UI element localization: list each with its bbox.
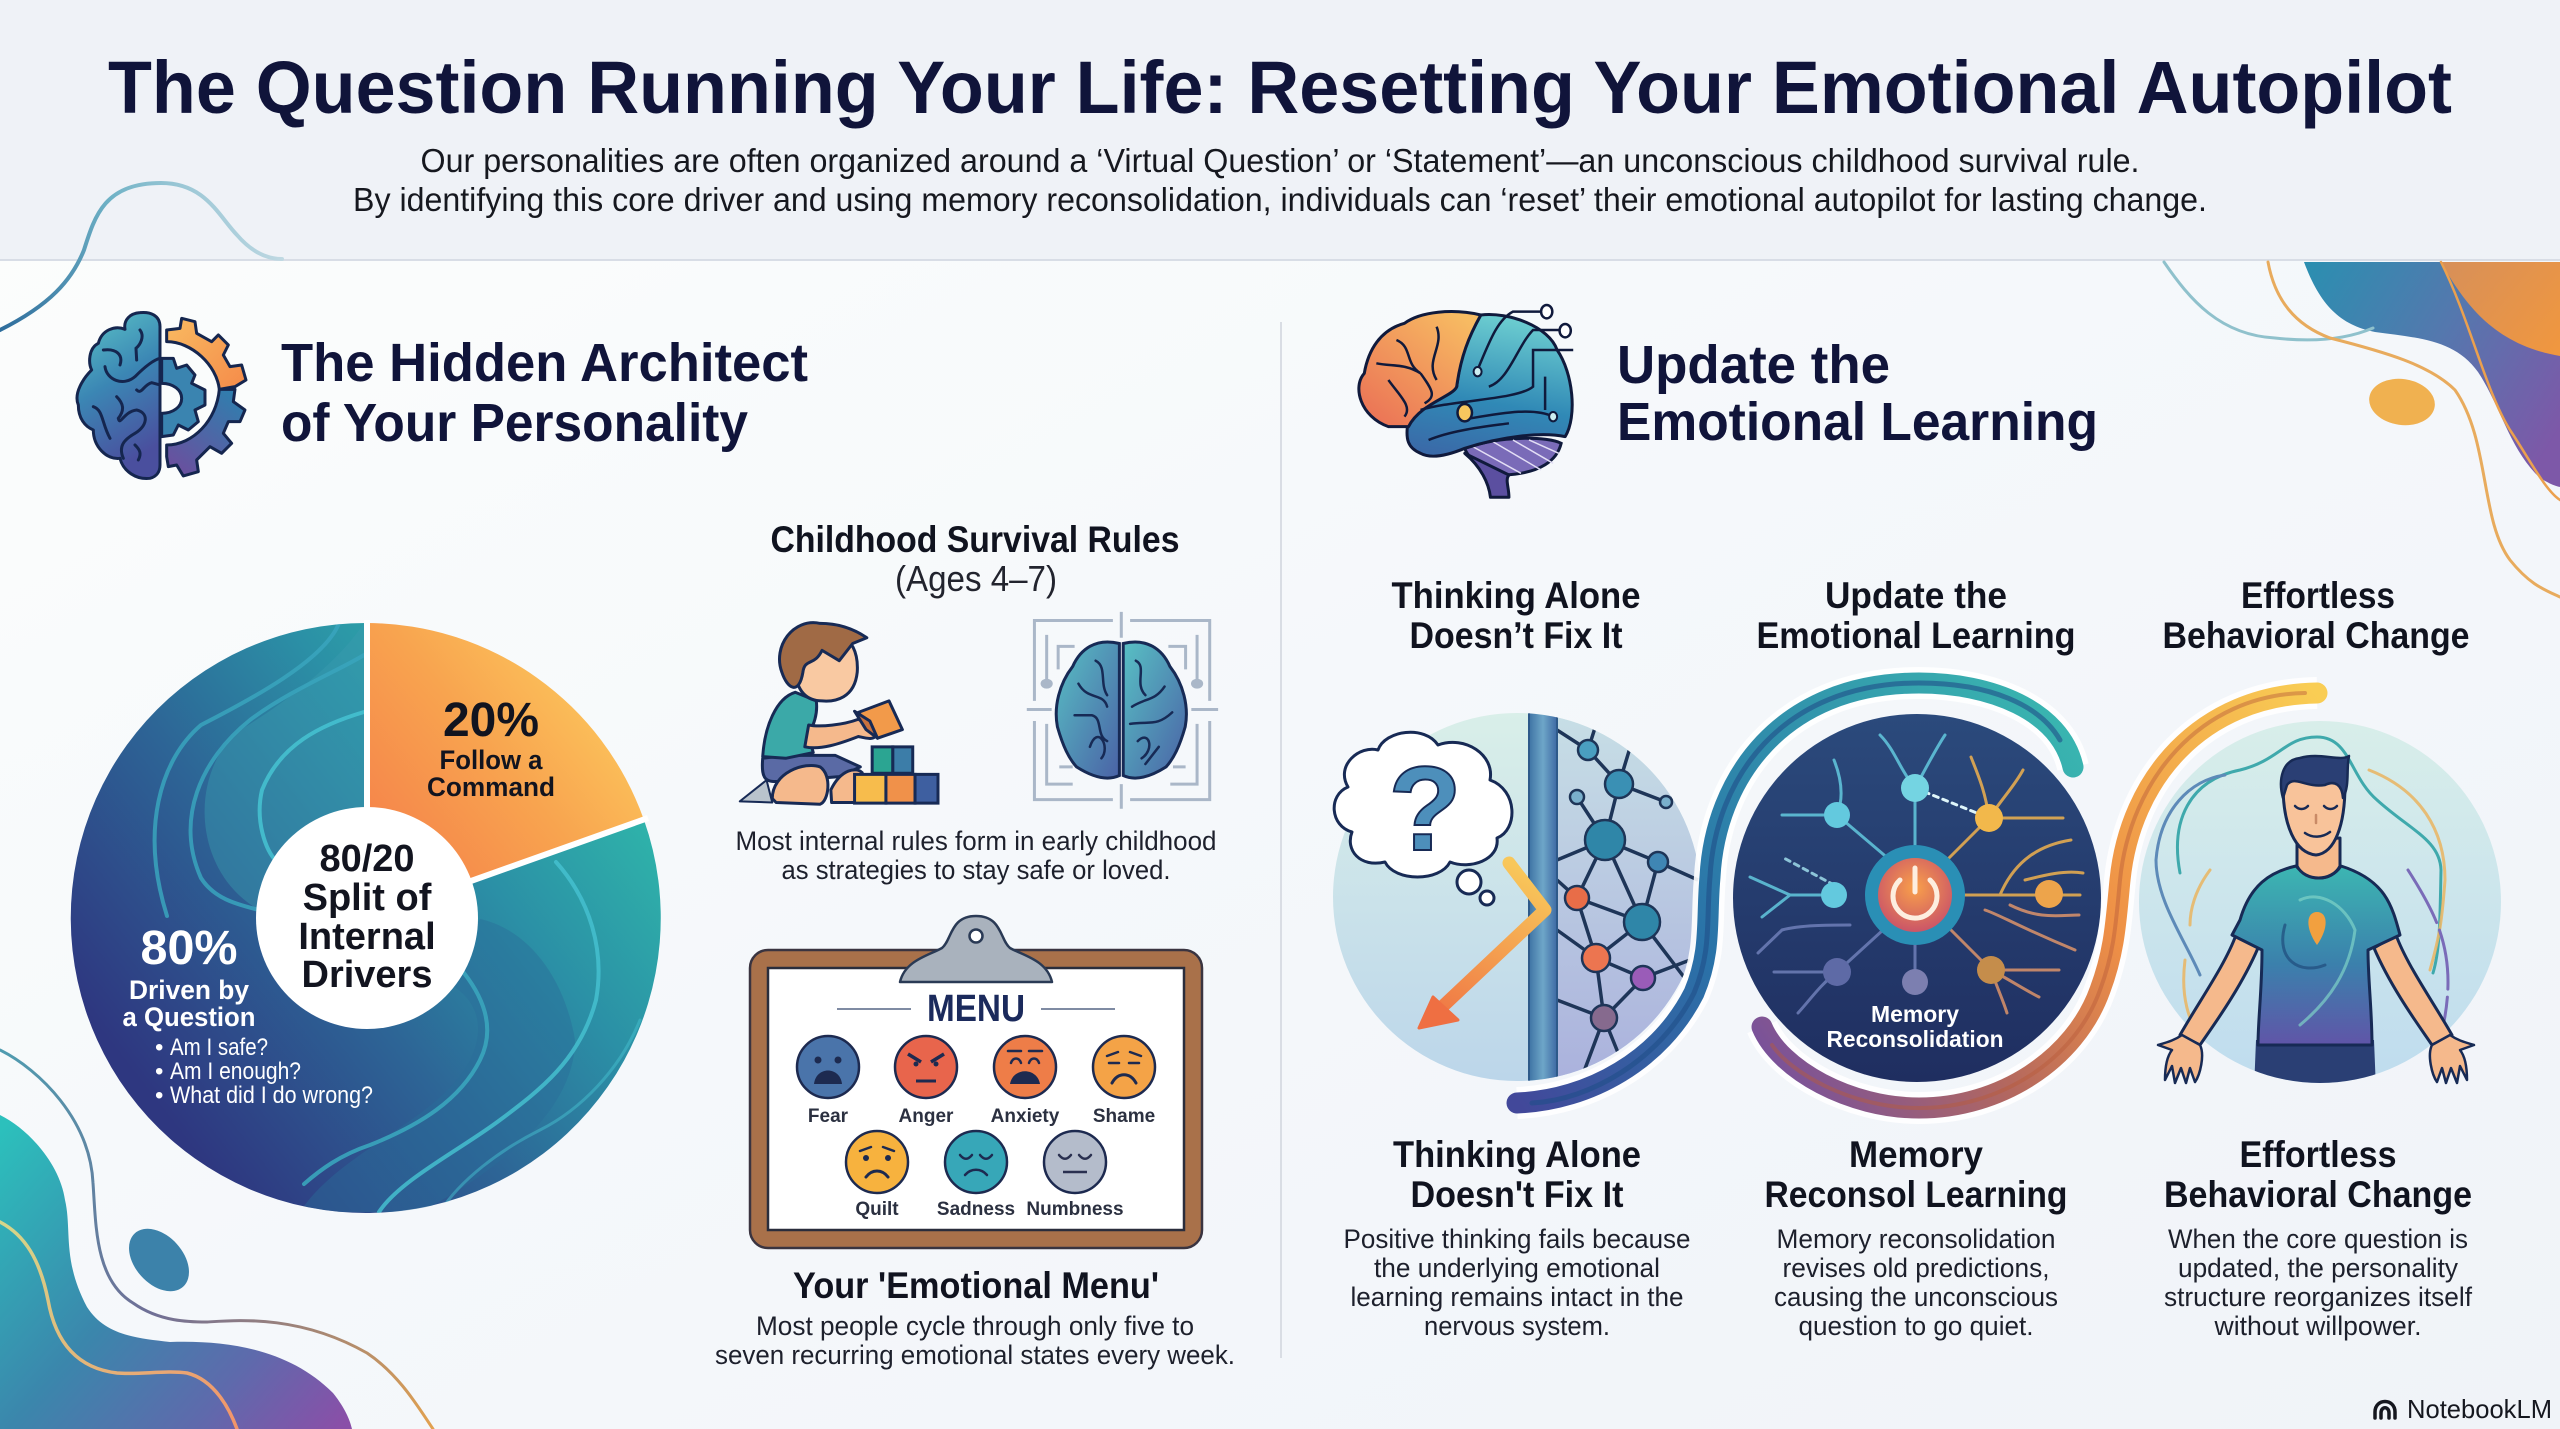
- caption: emotional menu: seven recurring emotional states every week.: [715, 1340, 1235, 1370]
- column headings: Doesn’t Fix It: [1410, 615, 1622, 656]
- label: 80 percent: What did I do wrong?: [170, 1082, 373, 1109]
- caption: childhood rules: Most internal rules form in early childhood: [736, 826, 1216, 856]
- illustration: memory reconsolidation: [1733, 714, 2101, 1082]
- face: anxiety: Anxiety: [991, 1106, 1060, 1127]
- icon: brain in scanner frame: [1027, 612, 1218, 809]
- face: anger: [895, 1036, 957, 1127]
- face: numbness: [1026, 1131, 1124, 1220]
- heading: childhood survival rules: [770, 519, 1180, 599]
- caption: childhood rules: as strategies to stay safe or loved.: [782, 855, 1170, 885]
- description: thinking alone: [1344, 1134, 1690, 1341]
- description: effortless change: structure reorganizes itself: [2164, 1282, 2472, 1312]
- pie chart: 80/20 split: [71, 620, 661, 1213]
- description: thinking alone: nervous system.: [1424, 1311, 1610, 1341]
- description: thinking alone: learning remains intact in the: [1350, 1282, 1684, 1312]
- label: 20 percent: Command: [427, 772, 555, 802]
- caption: emotional menu: Most people cycle through only five to: [756, 1311, 1194, 1341]
- description: effortless change: When the core question is: [2168, 1224, 2468, 1254]
- face: anxiety: [991, 1036, 1060, 1127]
- label: pie centre: Internal: [298, 916, 436, 958]
- clipboard: emotional menu: [750, 916, 1202, 1248]
- face: shame: Shame: [1093, 1106, 1155, 1127]
- label: 80 percent: •: [155, 1034, 163, 1061]
- label: 80 percent: Am I safe?: [170, 1034, 268, 1061]
- illustration: effortless person: [2139, 721, 2501, 1090]
- description: memory reconsol learning: Memory: [1849, 1134, 1983, 1175]
- column descriptions: [1344, 1134, 2472, 1341]
- subtitle: By identifying this core driver and using memory reconsolidation, individuals can ‘reset’ their emotional autopilot for lasting change.: [353, 181, 2207, 218]
- label: pie centre: 80/20: [319, 838, 415, 880]
- description: memory reconsol learning: Reconsol Learning: [1764, 1174, 2068, 1215]
- label: 80 percent: •: [155, 1082, 163, 1109]
- heading: hidden architect: [281, 333, 808, 453]
- description: memory reconsol learning: revises old predictions,: [1782, 1253, 2050, 1283]
- decorative blob: bottom left: [0, 1050, 433, 1429]
- subtitle: [353, 142, 2207, 218]
- heading: update the emotional learning: [1617, 335, 2098, 452]
- title: The Question Running Your Life: Resetting Your Emotional Autopilot: [108, 46, 2452, 129]
- label: 80 percent: Am I enough?: [170, 1058, 301, 1085]
- column headings: Emotional Learning: [1756, 615, 2076, 656]
- column headings: Behavioral Change: [2162, 615, 2470, 656]
- decorative blob: top right: [2164, 262, 2560, 597]
- icon: brain and gears: [77, 312, 246, 479]
- thought cloud with question mark: ?: [1388, 742, 1462, 876]
- face: guilt: [846, 1131, 908, 1220]
- label: pie centre: Split of: [303, 877, 432, 919]
- memory reconsolidation label: Memory: [1871, 1001, 1959, 1027]
- heading: hidden architect: of Your Personality: [281, 393, 748, 453]
- icon: brain with circuits: [1359, 305, 1573, 497]
- menu heading: MENU: [927, 988, 1025, 1030]
- label: 80 percent: a Question: [122, 1002, 256, 1032]
- label: 20 percent: 20%: [443, 694, 539, 747]
- description: effortless change: without willpower.: [2214, 1311, 2422, 1341]
- description: thinking alone: Doesn't Fix It: [1410, 1174, 1624, 1215]
- face: guilt: Quilt: [855, 1199, 899, 1220]
- caption: emotional menu: [715, 1265, 1235, 1370]
- memory reconsolidation label: Reconsolidation: [1826, 1026, 2004, 1052]
- label: 20 percent: Follow a: [440, 745, 543, 775]
- icon: child with blocks: [740, 623, 938, 804]
- label: 80 percent: [122, 922, 373, 1109]
- label: 20 percent: [427, 694, 555, 802]
- heading: childhood survival rules: Childhood Survival Rules: [770, 519, 1180, 560]
- description: thinking alone: Positive thinking fails because: [1344, 1224, 1690, 1254]
- power button: [1865, 845, 1965, 945]
- label: 80 percent: •: [155, 1058, 163, 1085]
- face: anger: Anger: [899, 1106, 954, 1127]
- connecting arc: blue: [1517, 683, 2073, 1103]
- description: effortless change: [2164, 1134, 2472, 1341]
- label: pie centre: [298, 838, 436, 996]
- heading: update the emotional learning: Update the: [1617, 335, 1890, 395]
- description: thinking alone: the underlying emotional: [1374, 1253, 1660, 1283]
- description: thinking alone: Thinking Alone: [1393, 1134, 1641, 1175]
- subtitle: Our personalities are often organized around a ‘Virtual Question’ or ‘Statement’—an unconscious childhood survival rule.: [420, 142, 2140, 179]
- description: memory reconsol learning: Memory reconsolidation: [1776, 1224, 2056, 1254]
- heading: hidden architect: The Hidden Architect: [281, 333, 808, 393]
- face: sadness: [937, 1131, 1015, 1220]
- caption: emotional menu: Your 'Emotional Menu': [793, 1265, 1159, 1306]
- heading: childhood survival rules: (Ages 4–7): [895, 558, 1057, 599]
- label: 80 percent: Driven by: [129, 975, 249, 1005]
- face: sadness: Sadness: [937, 1199, 1015, 1220]
- notebooklm watermark: NotebookLM: [2407, 1394, 2552, 1424]
- description: effortless change: Effortless: [2240, 1134, 2396, 1175]
- illustration: thinking alone: [1332, 713, 1698, 1081]
- description: effortless change: updated, the personality: [2178, 1253, 2458, 1283]
- description: memory reconsol learning: causing the unconscious: [1774, 1282, 2058, 1312]
- label: 80 percent: 80%: [140, 922, 238, 975]
- divider: [1280, 322, 1282, 1358]
- face: fear: Fear: [808, 1106, 849, 1127]
- description: memory reconsol learning: [1764, 1134, 2068, 1341]
- face: numbness: Numbness: [1026, 1199, 1124, 1220]
- connecting arc: orange: [1762, 693, 2317, 1108]
- column headings: Thinking Alone: [1392, 575, 1640, 616]
- heading: update the emotional learning: Emotional Learning: [1617, 392, 2098, 452]
- column headings: Effortless: [2241, 575, 2395, 616]
- label: pie centre: Drivers: [302, 954, 432, 996]
- header band: [0, 0, 2560, 261]
- memory reconsolidation label: [1826, 1001, 2004, 1052]
- column headings: [1392, 575, 2470, 656]
- column headings: Update the: [1825, 575, 2007, 616]
- face: shame: [1093, 1036, 1155, 1127]
- description: memory reconsol learning: question to go quiet.: [1798, 1311, 2034, 1341]
- description: effortless change: Behavioral Change: [2164, 1174, 2472, 1215]
- thought cloud with question mark: [1334, 732, 1512, 905]
- face: fear: [797, 1036, 859, 1127]
- deflected arrow: [1419, 863, 1545, 1028]
- caption: childhood rules: [736, 826, 1216, 885]
